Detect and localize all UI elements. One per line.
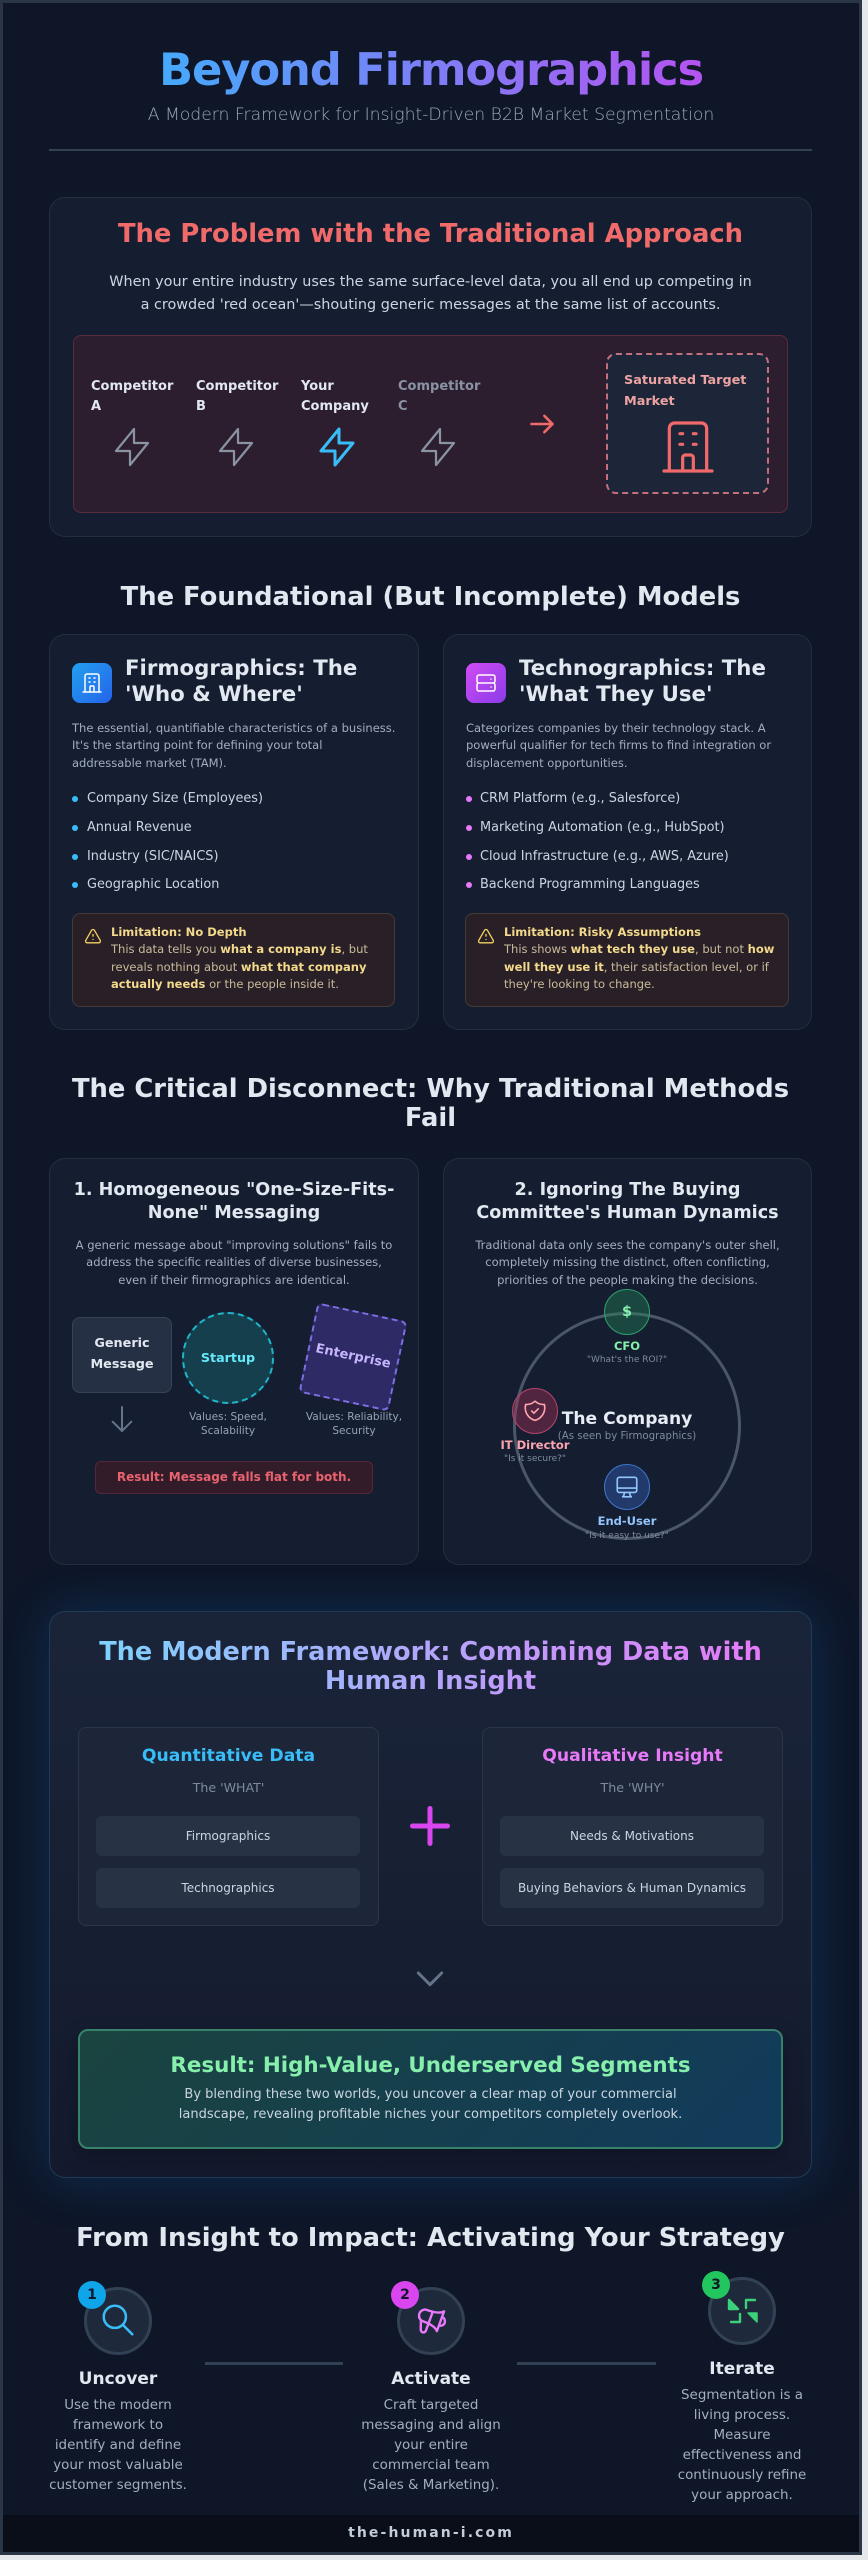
card heading bbox=[476, 1180, 779, 1223]
result text: landscape, revealing profitable niches your competitors completely overlook. bbox=[179, 2107, 682, 2122]
step title: Uncover bbox=[79, 2369, 157, 2389]
card description: Categorizes companies by their technology stack. A bbox=[466, 721, 766, 735]
limitation text bbox=[504, 925, 774, 991]
item: needs bbox=[500, 1816, 764, 1856]
bullet list bbox=[72, 791, 263, 892]
icon: building bbox=[662, 421, 714, 473]
panel: qualitative insight bbox=[482, 1727, 783, 1926]
step text: effectiveness and bbox=[683, 2448, 801, 2463]
competitor A label: A bbox=[91, 399, 101, 414]
bullet list: CRM Platform (e.g., Salesforce) bbox=[480, 791, 680, 806]
card description bbox=[475, 1238, 780, 1287]
step text: living process. bbox=[694, 2408, 790, 2423]
step text: continuously refine bbox=[678, 2468, 806, 2483]
bullet list: Annual Revenue bbox=[87, 820, 192, 835]
card heading: Firmographics: The bbox=[125, 656, 357, 681]
limitation text: they're looking to change. bbox=[504, 977, 655, 991]
step text: Use the modern bbox=[64, 2398, 172, 2413]
competitor A label: Competitor bbox=[91, 379, 173, 394]
your company label: Company bbox=[301, 399, 369, 414]
heading: critical disconnect bbox=[72, 1074, 789, 1132]
card description: It's the starting point for defining your total bbox=[72, 738, 322, 752]
competitor B label: Competitor bbox=[196, 379, 278, 394]
card heading bbox=[519, 656, 766, 707]
generic message box: Generic bbox=[94, 1336, 150, 1351]
step text: identify and define bbox=[55, 2438, 181, 2453]
market label: Market bbox=[624, 394, 675, 408]
enterprise rotated square bbox=[298, 1302, 408, 1412]
icon: bolt C bbox=[420, 428, 456, 466]
enterprise values: Values: Reliability, bbox=[306, 1411, 402, 1423]
result heading: Result: High-Value, Underserved Segments bbox=[170, 2053, 691, 2078]
result text bbox=[179, 2087, 682, 2122]
arrow down bbox=[112, 1406, 132, 1432]
market label: Saturated Target bbox=[624, 373, 746, 388]
startup values bbox=[189, 1411, 267, 1437]
card heading: 1. Homogeneous "One-Size-Fits- bbox=[74, 1180, 394, 1200]
card description: priorities of the people making the decisions. bbox=[497, 1273, 758, 1287]
IT Director label: IT Director bbox=[500, 1438, 570, 1452]
item: buying behaviors: Buying Behaviors & Human Dynamics bbox=[518, 1881, 746, 1895]
step title: Activate bbox=[391, 2369, 471, 2389]
limitation text: reveals nothing about what that company bbox=[111, 960, 366, 974]
heading: critical disconnect: The Critical Disconnect: Why Traditional Methods bbox=[72, 1074, 789, 1104]
card description: address the specific realities of diverse businesses, bbox=[86, 1255, 382, 1269]
heading: framework: Human Insight bbox=[325, 1666, 536, 1696]
step text: (Sales & Marketing). bbox=[363, 2478, 499, 2493]
panel: homogeneous messaging bbox=[49, 1158, 419, 1565]
bullet list bbox=[466, 791, 729, 892]
step text: commercial team bbox=[372, 2458, 490, 2473]
card description: The essential, quantifiable characteristics of a business. bbox=[72, 721, 395, 735]
card description: Traditional data only sees the company's outer shell, bbox=[475, 1238, 780, 1252]
company ring bbox=[513, 1312, 741, 1540]
card description bbox=[72, 721, 395, 770]
bullet list: Backend Programming Languages bbox=[480, 877, 700, 892]
card heading: Technographics: The bbox=[519, 656, 766, 681]
icon: shield bbox=[524, 1400, 546, 1422]
generic message box: Message bbox=[90, 1356, 154, 1372]
step 2: activate bbox=[361, 2281, 501, 2493]
CFO quote: "What's the ROI?" bbox=[587, 1355, 667, 1365]
step 3: iterate bbox=[678, 2271, 806, 2503]
qualitative subtitle: The 'WHY' bbox=[601, 1780, 664, 1795]
icon: server badge bbox=[466, 663, 506, 703]
End-User label: End-User bbox=[598, 1514, 656, 1528]
icon: focus corners bbox=[708, 2277, 776, 2345]
bullet list: Company Size (Employees) bbox=[87, 791, 263, 806]
End-User persona bbox=[604, 1464, 650, 1510]
callout: limitation bbox=[465, 913, 789, 1007]
generic message box bbox=[72, 1317, 172, 1393]
icon: bolt your company bbox=[319, 428, 355, 466]
item: firmographics bbox=[96, 1816, 360, 1856]
enterprise values: Security bbox=[332, 1425, 376, 1437]
title: Beyond Firmographics bbox=[159, 43, 703, 96]
competitor A label bbox=[91, 379, 174, 414]
startup circle: Startup bbox=[201, 1350, 255, 1365]
step text bbox=[49, 2398, 187, 2493]
icon: plus bbox=[410, 1806, 450, 1846]
badge 2 bbox=[391, 2281, 419, 2309]
step text: your approach. bbox=[691, 2488, 793, 2503]
company label: The Company bbox=[562, 1409, 692, 1429]
footer bbox=[3, 2515, 859, 2552]
text: problem description bbox=[109, 274, 752, 313]
heading: foundational models: The Foundational (But Incomplete) Models bbox=[121, 582, 740, 612]
item: technographics: Technographics bbox=[181, 1881, 275, 1895]
IT Director quote: "Is it secure?" bbox=[504, 1454, 566, 1464]
competitor C label bbox=[398, 379, 480, 414]
icon: building badge bbox=[72, 663, 112, 703]
card description bbox=[466, 721, 772, 770]
icon: monitor bbox=[616, 1476, 638, 1498]
limitation text: This data tells you what a company is, but bbox=[111, 942, 368, 956]
heading: activating strategy: From Insight to Impact: Activating Your Strategy bbox=[76, 2223, 785, 2253]
startup values: Values: Speed, bbox=[189, 1411, 267, 1423]
badge 3 bbox=[702, 2271, 730, 2299]
saturated target market bbox=[606, 353, 769, 494]
step text: messaging and align bbox=[361, 2418, 501, 2433]
step text: Craft targeted bbox=[384, 2398, 478, 2413]
enterprise values bbox=[306, 1411, 402, 1437]
competitor B label: B bbox=[196, 399, 206, 414]
badge 2: 2 bbox=[400, 2287, 410, 2303]
icon: bolt B bbox=[218, 428, 254, 466]
card description: even if their firmographics are identical. bbox=[118, 1273, 350, 1287]
icon: dollar: $ bbox=[622, 1304, 632, 1320]
card description: completely missing the distinct, often conflicting, bbox=[485, 1255, 770, 1269]
subtitle: A Modern Framework for Insight-Driven B2B Market Segmentation bbox=[148, 105, 714, 125]
card heading: 'Who & Where' bbox=[125, 682, 303, 707]
panel: technographics bbox=[443, 634, 812, 1030]
qualitative heading: Qualitative Insight bbox=[542, 1746, 723, 1766]
card description: addressable market (TAM). bbox=[72, 756, 227, 770]
heading: framework: The Modern Framework: Combining Data with bbox=[99, 1637, 762, 1667]
quantitative heading: Quantitative Data bbox=[142, 1746, 315, 1766]
card heading: Committee's Human Dynamics bbox=[476, 1203, 779, 1223]
item: technographics bbox=[96, 1868, 360, 1908]
card description bbox=[76, 1238, 392, 1287]
step text bbox=[657, 2386, 827, 2506]
badge 1 bbox=[78, 2281, 106, 2309]
panel: modern framework bbox=[49, 1611, 812, 2178]
bullet list: Marketing Automation (e.g., HubSpot) bbox=[480, 820, 725, 835]
panel: firmographics bbox=[49, 634, 419, 1030]
competitor C label: Competitor bbox=[398, 379, 480, 394]
card heading bbox=[74, 1180, 394, 1223]
text: problem description: a crowded 'red ocean'—shouting generic messages at the same list of accounts. bbox=[141, 297, 720, 313]
bullet list: Industry (SIC/NAICS) bbox=[87, 849, 218, 864]
CFO persona bbox=[604, 1289, 650, 1335]
End-User quote: "Is it easy to use?" bbox=[585, 1531, 669, 1541]
diagram: competitors converge on a saturated market bbox=[73, 335, 788, 513]
startup circle bbox=[182, 1312, 274, 1404]
step text: framework to bbox=[73, 2418, 163, 2433]
card heading bbox=[125, 656, 357, 707]
panel: buying committee bbox=[443, 1158, 812, 1565]
item: firmographics: Firmographics bbox=[186, 1829, 270, 1843]
IT Director persona bbox=[512, 1388, 558, 1434]
icon: search bbox=[84, 2287, 152, 2355]
result callout: Result: Message falls flat for both. bbox=[117, 1470, 351, 1484]
heading: critical disconnect: Fail bbox=[405, 1102, 456, 1132]
step text: Measure bbox=[713, 2428, 771, 2443]
step text: Segmentation is a bbox=[681, 2388, 803, 2403]
step text bbox=[361, 2398, 501, 2493]
limitation text: actually needs or the people inside it. bbox=[111, 977, 339, 991]
heading: problem: The Problem with the Traditional Approach bbox=[118, 219, 743, 249]
icon: warning bbox=[84, 928, 102, 944]
market label bbox=[624, 373, 746, 408]
startup values: Scalability bbox=[201, 1425, 255, 1437]
panel: traditional approach problem bbox=[49, 197, 812, 537]
bullet list: Cloud Infrastructure (e.g., AWS, Azure) bbox=[480, 849, 729, 864]
badge 3: 3 bbox=[711, 2277, 721, 2293]
step text: customer segments. bbox=[49, 2478, 187, 2493]
CFO label: CFO bbox=[614, 1339, 640, 1353]
result callout bbox=[78, 2029, 783, 2149]
panel: quantitative data bbox=[78, 1727, 379, 1926]
arrow to market bbox=[530, 414, 554, 434]
card description: displacement opportunities. bbox=[466, 756, 627, 770]
limitation text: well they use it, their satisfaction level, or if bbox=[504, 960, 769, 974]
step text: your entire bbox=[394, 2438, 468, 2453]
limitation text: Limitation: No Depth bbox=[111, 925, 247, 939]
step text: your most valuable bbox=[53, 2458, 183, 2473]
badge 1: 1 bbox=[87, 2287, 97, 2303]
step 1: uncover bbox=[49, 2281, 187, 2493]
enterprise rotated square: Enterprise bbox=[314, 1341, 392, 1372]
company sublabel: (As seen by Firmographics) bbox=[558, 1431, 696, 1442]
heading: framework bbox=[89, 1638, 772, 1696]
icon: warning bbox=[478, 928, 494, 944]
quantitative subtitle: The 'WHAT' bbox=[193, 1780, 264, 1795]
step title: Iterate bbox=[709, 2359, 775, 2379]
icon: chevron down bbox=[416, 1971, 444, 1986]
card heading: 2. Ignoring The Buying bbox=[515, 1180, 740, 1200]
your company label bbox=[300, 379, 369, 414]
result callout bbox=[95, 1461, 373, 1494]
limitation text bbox=[110, 925, 368, 991]
card heading: 'What They Use' bbox=[519, 682, 713, 707]
item: needs: Needs & Motivations bbox=[570, 1829, 694, 1843]
your company label: Your bbox=[301, 379, 334, 394]
card heading: None" Messaging bbox=[148, 1203, 320, 1223]
card description: powerful qualifier for tech firms to find integration or bbox=[466, 738, 771, 752]
footer: the-human-i.com bbox=[348, 2525, 514, 2541]
limitation text: This shows what tech they use, but not how bbox=[504, 942, 774, 956]
result text: By blending these two worlds, you uncover a clear map of your commercial bbox=[184, 2087, 677, 2102]
text: problem description: When your entire industry uses the same surface-level data, you all end up competing in bbox=[109, 274, 752, 290]
limitation text: Limitation: Risky Assumptions bbox=[504, 925, 701, 939]
icon: megaphone bbox=[397, 2287, 465, 2355]
callout: limitation bbox=[72, 913, 395, 1007]
competitor B label bbox=[196, 379, 278, 414]
competitor C label: C bbox=[398, 399, 408, 414]
item: buying behaviors bbox=[500, 1868, 764, 1908]
card description: A generic message about "improving solutions" fails to bbox=[76, 1238, 392, 1252]
bullet list: Geographic Location bbox=[87, 877, 219, 892]
icon: bolt A bbox=[114, 428, 150, 466]
